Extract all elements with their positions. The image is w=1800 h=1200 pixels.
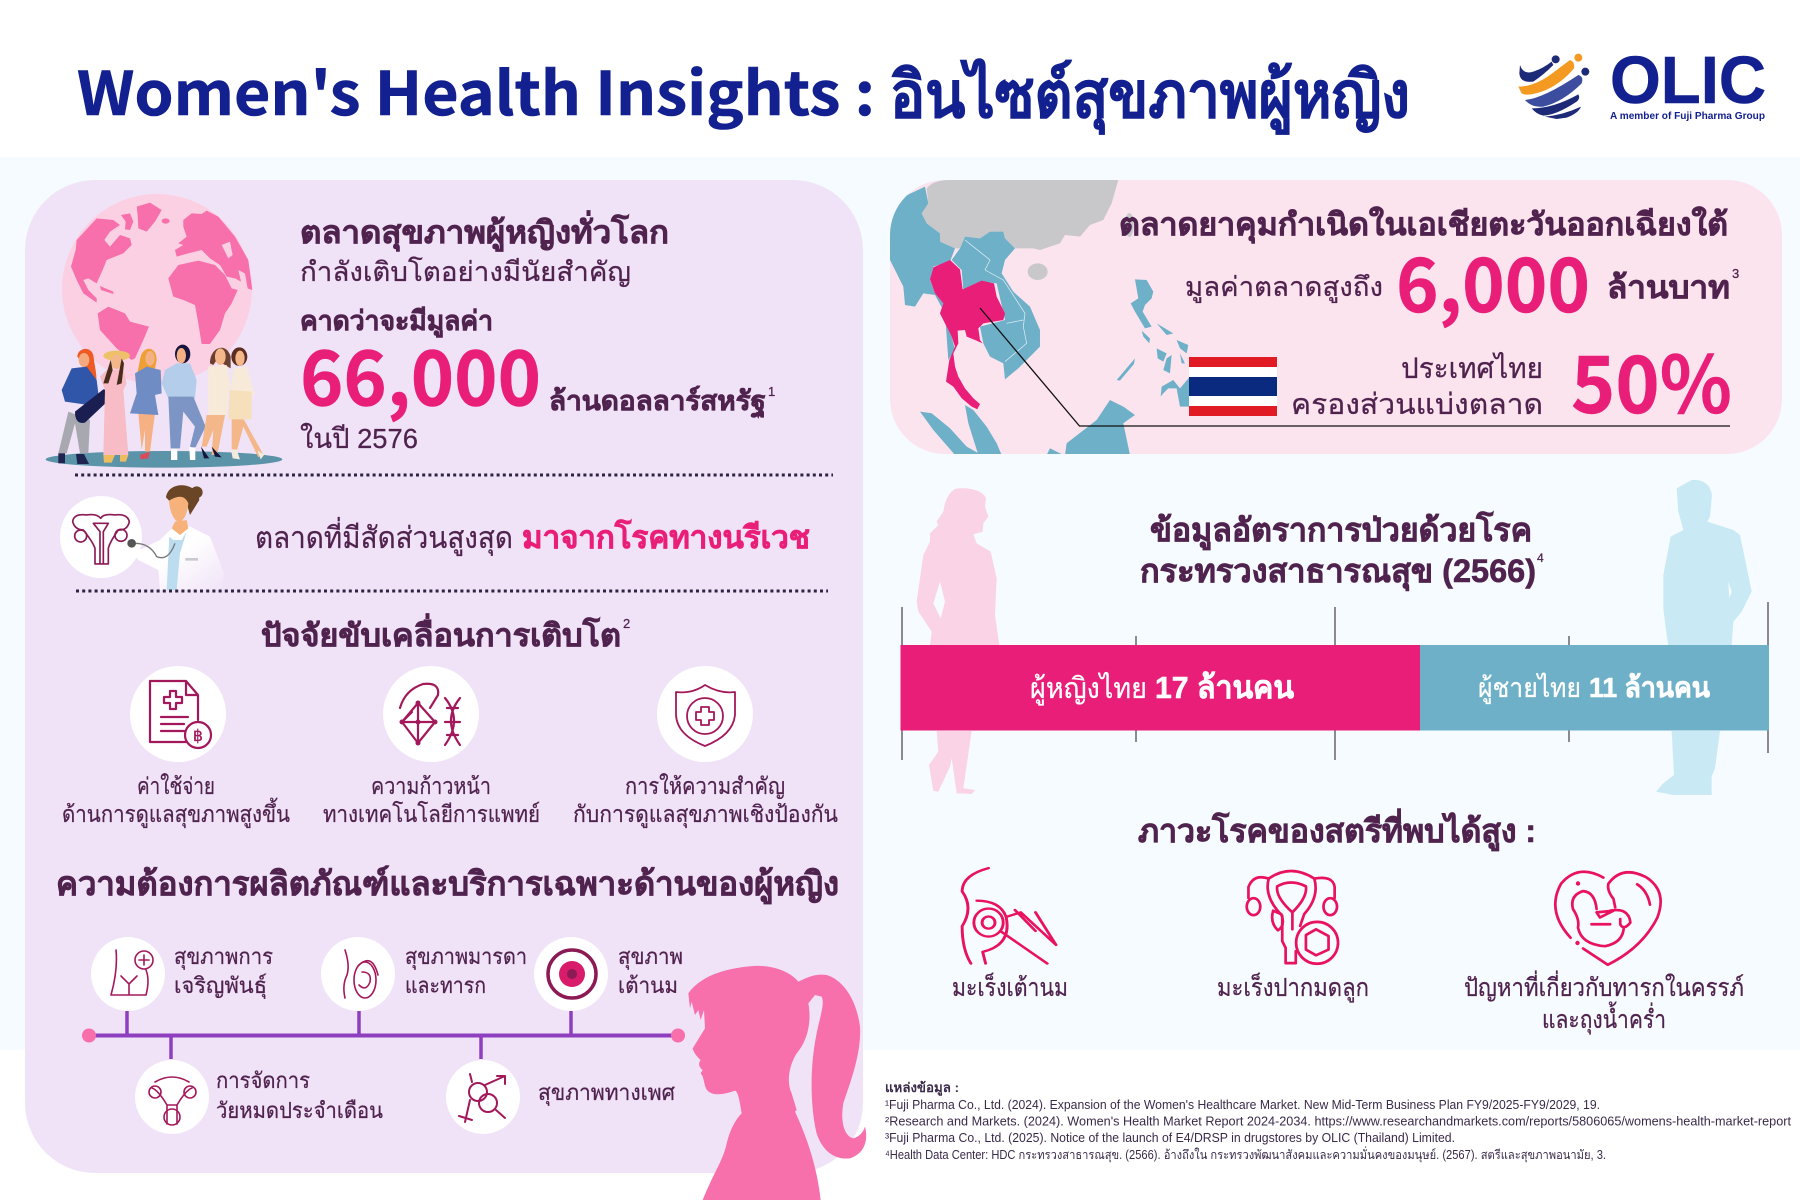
chart: patients by sex: 11 ล้านคน — [1589, 672, 1710, 703]
condition: cervical cancer — [1217, 871, 1369, 1003]
item: breast health — [534, 937, 683, 1011]
heading: common conditions: ภาวะโรคของสตรีที่พบได้สูง : — [1138, 808, 1536, 852]
text block: global market: 1 — [768, 384, 775, 399]
chart: patients by sex: ผู้หญิงไทย — [1030, 671, 1147, 706]
item: menopause management: การจัดการ — [216, 1068, 310, 1093]
chart: patients by sex — [900, 602, 1769, 760]
footnotes: sources: ²Research and Markets. (2024). Women's Health Market Report 2024-2034. https://www.researchandmarkets.com/reports/5806065/womens-health-market-report — [885, 1114, 1792, 1128]
illustration: group of women — [46, 345, 282, 468]
text block: contraceptive market: 3 — [1732, 266, 1739, 281]
growth driver: medical technology — [323, 666, 540, 827]
logo: OLIC: OLIC — [1610, 43, 1766, 118]
title — [77, 46, 1410, 135]
heading: disease statistics: 4 — [1537, 551, 1544, 565]
growth driver: healthcare cost: ค่าใช้จ่าย — [137, 773, 215, 799]
heading: women's products and services: ความต้องการผลิตภัณฑ์และบริการเฉพาะด้านของผู้หญิง — [56, 865, 839, 905]
panel: Southeast Asia contraceptive market — [890, 180, 1782, 455]
footnotes: sources — [885, 1080, 1792, 1163]
item: breast health: เต้านม — [618, 973, 678, 998]
text block: contraceptive market: มูลค่าตลาดสูงถึง — [1185, 272, 1383, 303]
text block: global market: คาดว่าจะมีมูลค่า — [300, 306, 493, 338]
growth driver: medical technology: ความก้าวหน้า — [371, 773, 491, 799]
timeline — [82, 1011, 685, 1059]
footnotes: sources: ³Fuji Pharma Co., Ltd. (2025). Notice of the launch of E4/DRSP in drugstores by OLIC (Thailand) Limited. — [885, 1131, 1455, 1145]
text block: contraceptive market: 6,000 — [1396, 225, 1590, 334]
growth driver: preventive care: กับการดูแลสุขภาพเชิงป้องกัน — [573, 801, 838, 828]
heading: growth drivers: ปัจจัยขับเคลื่อนการเติบโต — [261, 613, 621, 653]
icon: Thai flag — [1189, 357, 1277, 416]
item: reproductive health — [91, 937, 273, 1011]
footnotes: sources: ⁴Health Data Center: HDC กระทรวงสาธารณสุข. (2566). อ้างถึงใน กระทรวงพัฒนาสังคมและความมั่นคงของมนุษย์. (2567). สตรีและสุขภาพอนามัย, 3. — [885, 1146, 1606, 1163]
logo: OLIC: A member of Fuji Pharma Group — [1610, 111, 1765, 122]
item: maternal and infant health — [321, 937, 527, 1011]
text block: Thailand share: 50% — [1571, 321, 1732, 436]
text: largest market share — [255, 517, 810, 557]
text block: global market: ตลาดสุขภาพผู้หญิงทั่วโลก — [300, 210, 669, 252]
text block: global market: กำลังเติบโตอย่างมีนัยสำคัญ — [300, 257, 631, 287]
text block: global market: 66,000 — [300, 318, 541, 428]
heading: disease statistics: กระทรวงสาธารณสุข (2566) — [1140, 553, 1536, 592]
item: sexual health: สุขภาพทางเพศ — [538, 1080, 675, 1106]
text block: global market: ล้านดอลลาร์สหรัฐ — [549, 385, 766, 419]
globe — [62, 194, 252, 384]
illustration: girl silhouette — [688, 966, 866, 1200]
illustration: doctor with stethoscope — [127, 485, 224, 590]
silhouette: man — [1656, 480, 1752, 795]
heading: growth drivers: 2 — [623, 616, 630, 631]
silhouette: woman — [917, 488, 999, 794]
logo: OLIC — [1518, 43, 1766, 122]
condition: fetal and amniotic fluid problems: ปัญหาที่เกี่ยวกับทารกในครรภ์ — [1464, 970, 1744, 1002]
item: reproductive health: เจริญพันธุ์ — [174, 973, 267, 999]
text: largest market share: มาจากโรคทางนรีเวช — [522, 519, 810, 555]
condition: cervical cancer: มะเร็งปากมดลูก — [1217, 972, 1369, 1003]
panel: global women's health market — [25, 180, 863, 1173]
text block: global market: ในปี 2576 — [300, 422, 418, 454]
text block: contraceptive market: ตลาดยาคุมกำเนิดในเอเชียตะวันออกเฉียงใต้ — [1119, 206, 1728, 244]
item: maternal and infant health: และทารก — [405, 973, 486, 998]
growth driver: preventive care: การให้ความสำคัญ — [625, 773, 785, 799]
growth driver: medical technology: ทางเทคโนโลยีการแพทย์ — [323, 801, 540, 827]
growth driver: healthcare cost: ด้านการดูแลสุขภาพสูงขึ้น — [62, 798, 290, 828]
item: reproductive health: สุขภาพการ — [174, 944, 273, 970]
growth driver: healthcare cost — [62, 666, 290, 828]
condition: fetal and amniotic fluid problems — [1464, 872, 1744, 1035]
condition: breast cancer — [952, 868, 1068, 1002]
text block: contraceptive market — [1119, 206, 1739, 334]
condition: fetal and amniotic fluid problems: และถุงน้ำคร่ำ — [1542, 1001, 1666, 1035]
item: breast health: สุขภาพ — [618, 944, 683, 970]
chart: patients by sex: 17 ล้านคน — [1155, 670, 1294, 705]
heading: disease statistics: ข้อมูลอัตราการป่วยด้วยโรค — [1150, 511, 1532, 551]
text block: global market — [300, 210, 775, 454]
chart: patients by sex: ผู้ชายไทย — [1478, 673, 1581, 704]
text block: Thailand share — [1291, 321, 1732, 436]
item: menopause management: วัยหมดประจำเดือน — [216, 1098, 383, 1123]
heading: disease statistics — [1140, 511, 1544, 592]
footnotes: sources: ¹Fuji Pharma Co., Ltd. (2024). Expansion of the Women's Healthcare Market. New Mid-Term Business Plan FY9/2025-FY9/2029, 19. — [885, 1098, 1600, 1112]
item: menopause management — [135, 1060, 383, 1134]
text: largest market share: ตลาดที่มีสัดส่วนสูงสุด — [255, 517, 513, 557]
text block: Thailand share: ครองส่วนแบ่งตลาด — [1291, 389, 1543, 421]
item: maternal and infant health: สุขภาพมารดา — [405, 944, 527, 970]
item: sexual health — [446, 1060, 675, 1134]
condition: breast cancer: มะเร็งเต้านม — [952, 972, 1068, 1002]
icon: uterus circle — [60, 496, 142, 578]
text block: Thailand share: ประเทศไทย — [1401, 351, 1543, 385]
footnotes: sources: แหล่งข้อมูล : — [885, 1080, 959, 1096]
growth driver: healthcare cost: ฿ — [193, 728, 203, 745]
text block: contraceptive market: ล้านบาท — [1607, 270, 1730, 305]
title: Women's Health Insights : — [77, 46, 875, 133]
title: อินไซต์สุขภาพผู้หญิง — [890, 58, 1410, 135]
map: Southeast Asia — [890, 180, 1190, 455]
growth driver: preventive care — [573, 666, 838, 828]
leader line — [980, 308, 1730, 426]
